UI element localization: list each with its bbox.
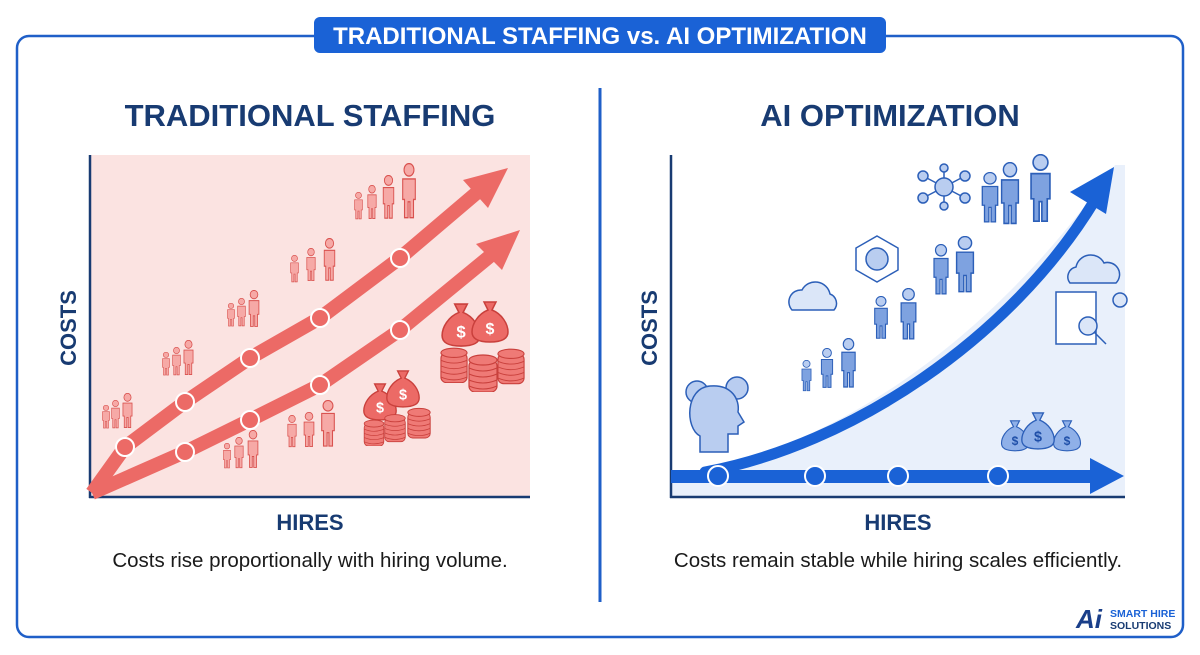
axis label: hires (right): HIRES: [864, 510, 932, 535]
axis label: hires (left): HIRES: [276, 510, 344, 535]
axis label: costs (right): COSTS: [637, 290, 662, 366]
heading: AI optimization: AI OPTIMIZATION: [760, 98, 1020, 133]
axis label: costs (left): COSTS: [56, 290, 81, 366]
logo: [1075, 604, 1175, 634]
upper arrow: [92, 168, 508, 493]
icon: AI head: [686, 377, 748, 452]
icon: network hub: [918, 164, 970, 210]
logo: SOLUTIONS: [1110, 620, 1171, 632]
title pill: [314, 17, 886, 53]
panel: traditional chart: [89, 155, 530, 498]
icons: money bags and coins: [364, 302, 524, 446]
icon: blue money bags: [1002, 413, 1080, 451]
icon: network hexagon: [856, 236, 898, 282]
flat arrow: [671, 458, 1124, 494]
caption right: Costs remain stable while hiring scales efficiently.: [674, 549, 1122, 572]
icons: people groups: [102, 164, 415, 468]
logo: Ai: [1075, 604, 1103, 634]
lower arrow: [92, 230, 520, 493]
icon: cloud: [789, 282, 837, 310]
icons: blue people: [802, 155, 1050, 391]
heading: traditional staffing: TRADITIONAL STAFFING: [125, 98, 495, 133]
caption left: Costs rise proportionally with hiring volume.: [112, 549, 508, 572]
panel: AI chart: [670, 155, 1127, 498]
curve arrow: [705, 167, 1114, 472]
icon: cloud database and resume search: [1056, 255, 1127, 344]
title pill: TRADITIONAL STAFFING vs. AI OPTIMIZATION: [333, 23, 867, 50]
logo: SMART HIRE: [1110, 608, 1175, 620]
